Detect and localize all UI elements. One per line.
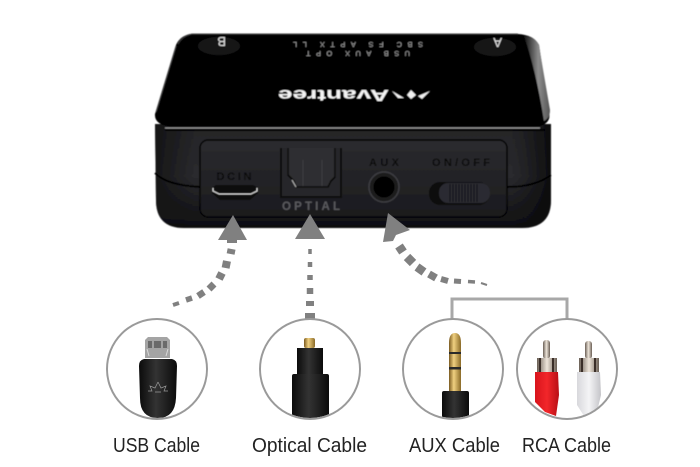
brand logo: Avantree: [278, 86, 430, 103]
label: codec list: SBC FS APTX LL: [293, 40, 423, 49]
icon: optical plug: [292, 338, 329, 420]
panel: AUX cable: [403, 319, 503, 457]
ON/OFF switch: ON/OFF: [432, 157, 490, 169]
label: Optical Cable: Optical Cable: [252, 434, 367, 457]
icon: 3.5mm jack: [442, 333, 469, 421]
circle outline: [107, 319, 207, 419]
device front body: [155, 124, 551, 228]
label: RCA Cable: RCA Cable: [522, 434, 611, 457]
AUX port: AUX: [369, 157, 400, 169]
AUX port: [369, 157, 400, 202]
optical port: [281, 148, 341, 213]
panel: optical cable: [252, 319, 367, 457]
button B: [198, 34, 240, 55]
DC IN port: [212, 171, 258, 200]
circle outline: [517, 319, 617, 419]
icon: micro USB plug: [139, 337, 177, 418]
device seams: [155, 173, 551, 187]
ON/OFF switch: [429, 157, 490, 205]
label: input list: USB AUX OPT: [306, 49, 410, 58]
DC IN port: DCIN: [216, 171, 252, 183]
arrow: USB cable to DC IN: [173, 215, 247, 305]
icon: Avantree leaf logo: [392, 90, 430, 99]
device top surface: [155, 34, 549, 127]
label: USB Cable: USB Cable: [113, 434, 200, 457]
button B: B: [217, 34, 226, 49]
front port panel: [200, 140, 507, 217]
circle outline: [403, 319, 503, 419]
panel: RCA cable: [517, 319, 617, 457]
arrow: optical cable to optical port: [295, 214, 325, 319]
label: AUX Cable: AUX Cable: [409, 434, 500, 457]
top labels: [293, 40, 423, 58]
arrow: AUX and RCA cables to AUX port: [383, 213, 487, 285]
bracket joining AUX and RCA: [452, 299, 567, 319]
brand name upside down: Avantree: [278, 86, 389, 103]
device: Avantree transmitter: [155, 34, 551, 228]
button A: [474, 35, 516, 56]
label: OPTIAL: OPTIAL: [282, 201, 340, 213]
button A: A: [493, 35, 502, 50]
icon: RCA plugs: [535, 340, 601, 416]
circle outline: [260, 319, 360, 419]
panel: USB cable: [107, 319, 207, 457]
